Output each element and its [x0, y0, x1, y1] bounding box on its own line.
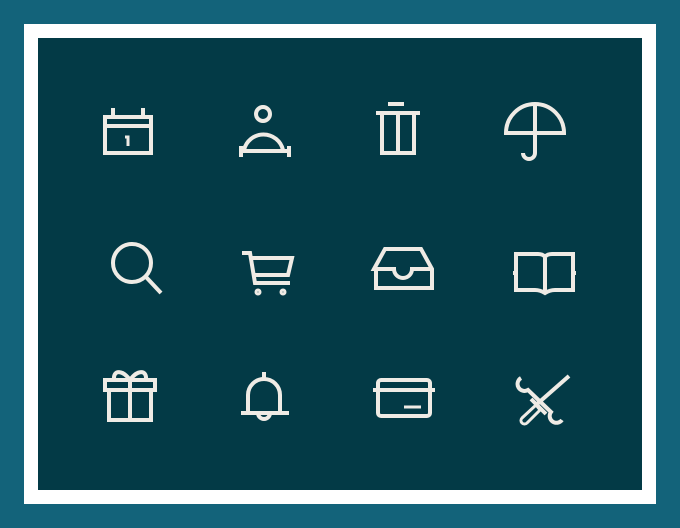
icon: card: [373, 380, 435, 416]
icon: cart: [242, 253, 292, 294]
icon: search: [113, 244, 161, 293]
icon: calendar: [103, 108, 153, 153]
icon: umbrella: [506, 104, 564, 159]
icon: gift: [105, 372, 155, 420]
icon: person: [239, 107, 291, 157]
icon: trash: [376, 104, 420, 153]
icon: book: [513, 254, 576, 293]
icon: bell: [241, 372, 289, 419]
icon: inbox: [374, 249, 432, 288]
icon: tools: [518, 376, 569, 424]
